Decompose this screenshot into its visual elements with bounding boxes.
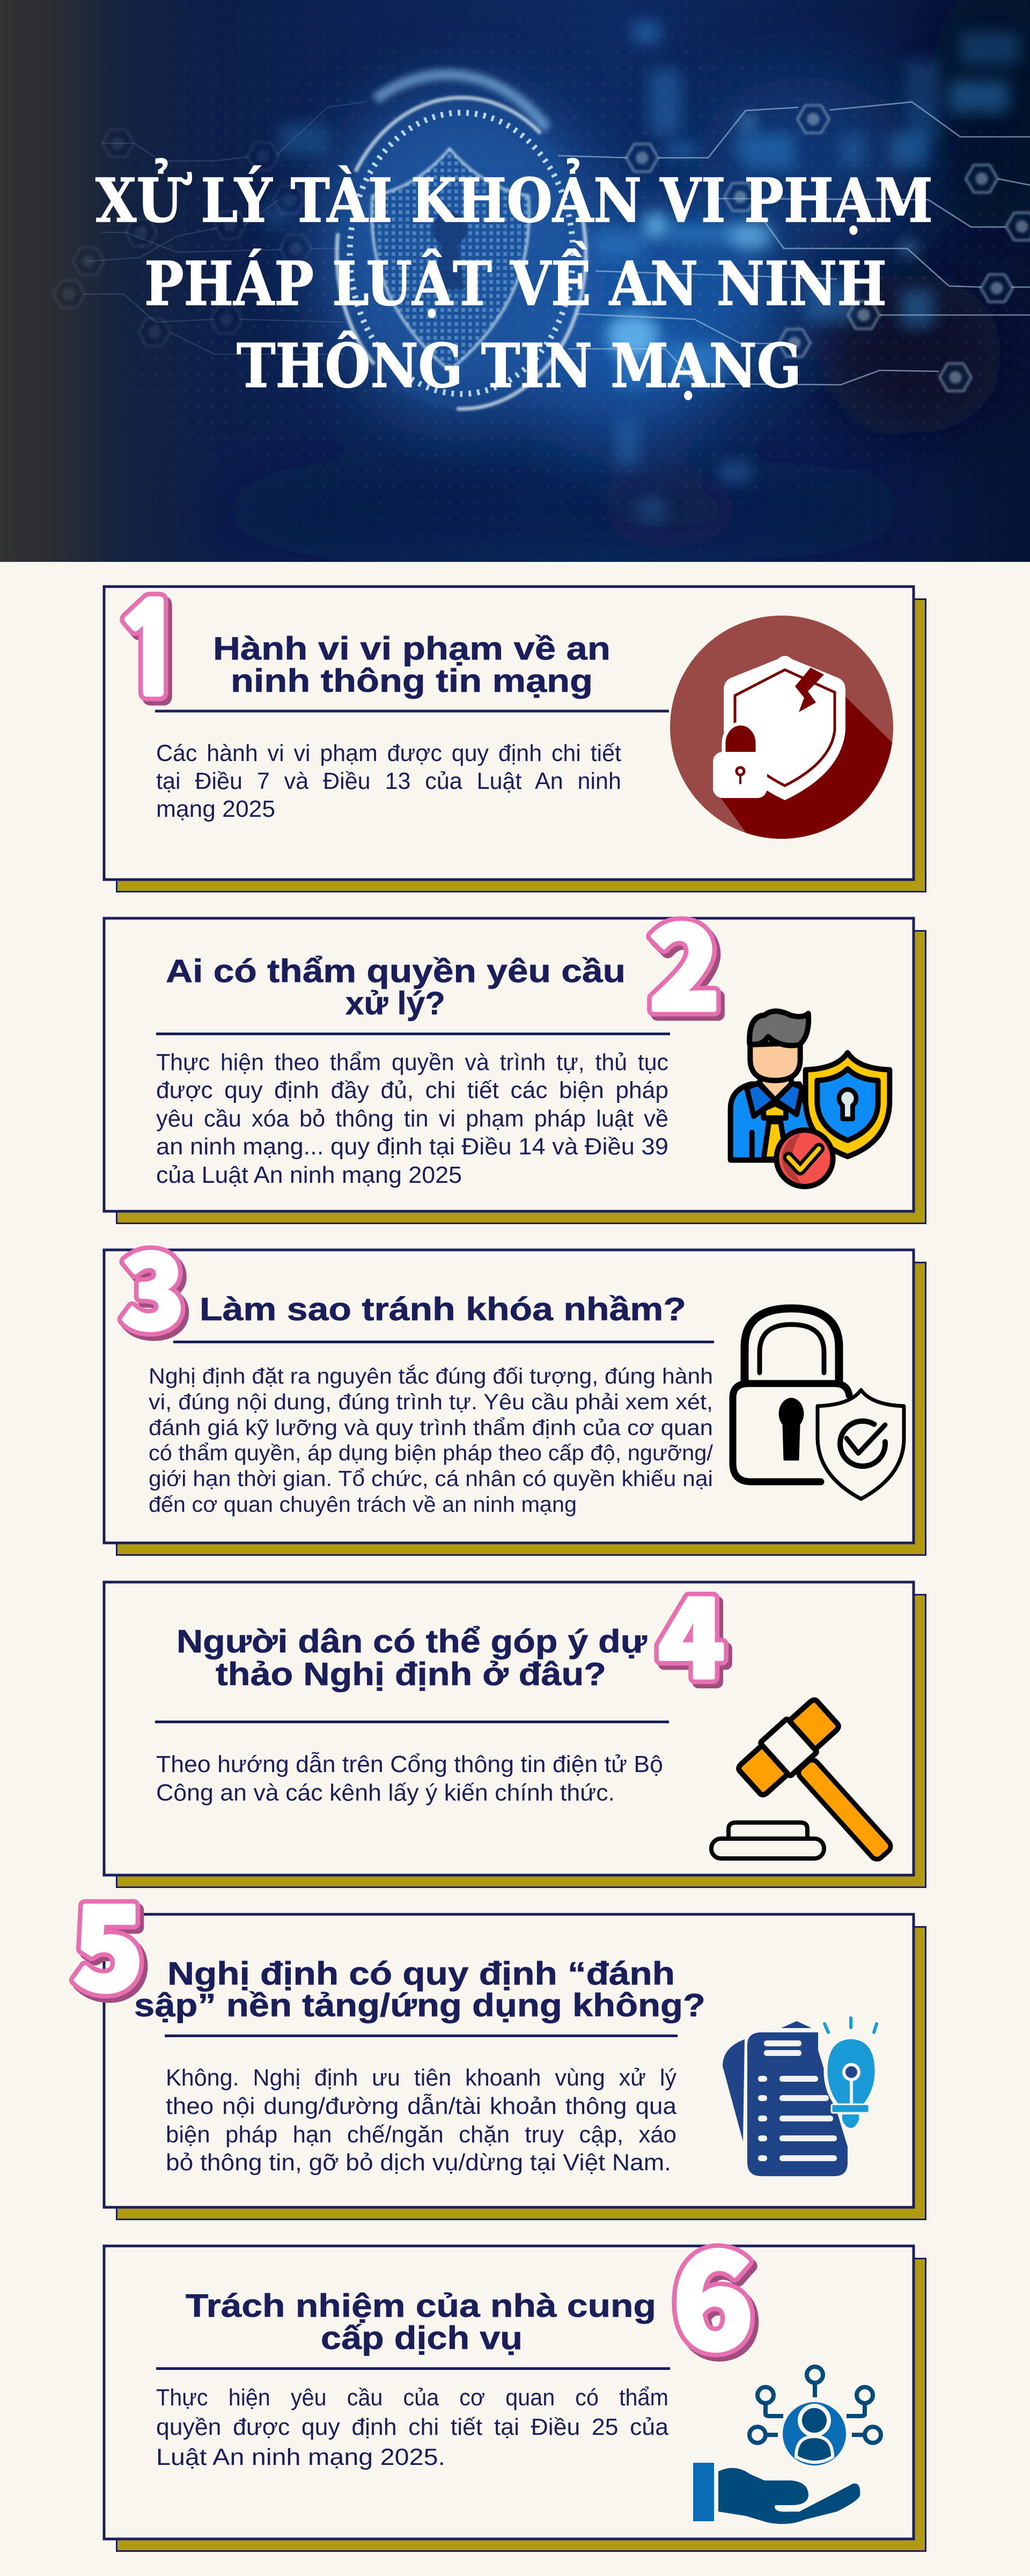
rule [156, 2367, 670, 2370]
body text: an ninh mạng... quy định tại Điều 14 và Điều 39 [156, 1134, 668, 1160]
body text: bỏ thông tin, gỡ bỏ dịch vụ/dừng tại Việt Nam. [166, 2150, 671, 2176]
bright highlights [606, 116, 915, 357]
rule [165, 2035, 678, 2037]
number 2: 2 [652, 878, 724, 1049]
body text [149, 1364, 713, 1517]
body text: của Luật An ninh mạng 2025 [156, 1162, 462, 1188]
body text: vi, đúng nội dung, đúng trình tự. Yêu cầu phải xem xét, [149, 1389, 713, 1414]
body text: Theo hướng dẫn trên Cổng thông tin điện tử Bộ [156, 1751, 663, 1777]
heading: ninh thông tin mạng [231, 663, 593, 699]
body text: được quy định đầy đủ, chi tiết các biện pháp [156, 1078, 668, 1103]
bokeh blocks [263, 21, 1019, 521]
panel 5: platform takedown [69, 1855, 926, 2220]
body text [156, 741, 621, 822]
body text: Thực hiện yêu cầu của cơ quan có thẩm [156, 2385, 668, 2411]
rule [173, 1341, 714, 1343]
body text: có thẩm quyền, áp dụng biện pháp theo cấp độ, ngưỡng/ [149, 1440, 713, 1465]
body text: Các hành vi vi phạm được quy định chi tiết [156, 741, 621, 766]
panel frame [104, 1914, 926, 2220]
heading: thảo Nghị định ở đâu? [216, 1656, 606, 1692]
heading: Hành vi vi phạm về an [213, 631, 610, 667]
number 1: 1 [113, 588, 188, 713]
hexagon icons [53, 105, 1030, 391]
heading: sập” nền tảng/ứng dụng không? [134, 1987, 705, 2023]
number 3: 3 [121, 1208, 185, 1359]
heading [166, 953, 626, 1021]
number 1: 1 [117, 592, 192, 717]
number 5: 5 [77, 1859, 148, 2029]
number 4: 4 [658, 1550, 725, 1709]
circuit lines [558, 102, 1030, 385]
body text: Thực hiện theo thẩm quyền và trình tự, thủ tục [156, 1050, 668, 1075]
title: XỬ LÝ TÀI KHOẢN VI PHẠM [95, 158, 933, 236]
icon: gavel and block [711, 1696, 923, 1889]
body text: giới hạn thời gian. Tổ chức, cá nhân có quyền khiếu nại [149, 1466, 713, 1491]
number 2: 2 [649, 874, 720, 1044]
heading: Làm sao tránh khóa nhầm? [200, 1291, 686, 1327]
body text: yêu cầu xóa bỏ thông tin vi phạm pháp luật về [156, 1106, 668, 1132]
number 6: 6 [676, 2198, 757, 2392]
panel frame [104, 587, 926, 892]
rule [155, 709, 669, 713]
body text: Không. Nghị định ưu tiên khoanh vùng xử lý [166, 2065, 676, 2091]
body text: Nghị định đặt ra nguyên tắc đúng đối tượng, đúng hành [149, 1364, 713, 1388]
icon: officer with shield and check badge [731, 1011, 889, 1187]
hero banner: cyber security background with title [0, 0, 1030, 562]
heading: xử lý? [345, 985, 445, 1021]
body text [156, 1751, 663, 1806]
number 2: 2 [649, 874, 720, 1044]
heading: Trách nhiệm của nhà cung [186, 2288, 656, 2324]
body text: theo nội dung/đường dẫn/tài khoản thông qua [166, 2093, 677, 2119]
panel frame [104, 1250, 926, 1555]
icon: padlock with shield [733, 1308, 904, 1499]
dot matrix [129, 0, 1030, 562]
heading: Người dân có thể góp ý dự [176, 1623, 648, 1659]
panel 1: violations [103, 585, 926, 892]
number 5: 5 [73, 1855, 144, 2024]
body text [156, 2385, 669, 2470]
number 3: 3 [125, 1212, 188, 1363]
body text: Công an và các kênh lấy ý kiến chính thức. [156, 1780, 615, 1806]
body text: mạng 2025 [156, 796, 275, 822]
number 4: 4 [658, 1550, 725, 1709]
body text [166, 2065, 677, 2176]
rule [155, 1721, 669, 1723]
body text: Luật An ninh mạng 2025. [156, 2445, 445, 2470]
number 6: 6 [672, 2193, 754, 2388]
icon: broken shield with padlock [670, 616, 893, 839]
heading: Nghị định có quy định “đánh [167, 1956, 675, 1992]
central shield ring [337, 75, 586, 409]
body text: đến cơ quan chuyên trách về an ninh mạng [149, 1492, 577, 1517]
panel frame [104, 2246, 926, 2551]
number 5: 5 [73, 1855, 144, 2024]
rule [156, 1033, 670, 1035]
heading [134, 1956, 705, 2023]
heading: cấp dịch vụ [321, 2320, 523, 2356]
number 4: 4 [662, 1555, 729, 1714]
title: THÔNG TIN MẠNG [237, 331, 801, 401]
heading [213, 631, 610, 699]
panel frame [104, 918, 926, 1224]
body text [156, 1050, 668, 1188]
body text: quyền được quy định chi tiết tại Điều 25 của [156, 2414, 669, 2440]
panel frame [104, 1582, 926, 1887]
number 3: 3 [121, 1208, 185, 1359]
body text: đánh giá kỹ lưỡng và quy trình thẩm định của cơ quan [149, 1415, 713, 1440]
number 1: 1 [113, 588, 188, 713]
soft glows [215, 0, 1030, 569]
icon: document with light bulb [723, 2018, 877, 2176]
heading [176, 1623, 648, 1692]
panel 6: provider responsibility [103, 2193, 926, 2552]
panel 4: public comments [103, 1550, 926, 1888]
body text: biện pháp hạn chế/ngăn chặn truy cập, xáo [166, 2122, 676, 2148]
number 6: 6 [672, 2193, 754, 2388]
heading: Ai có thẩm quyền yêu cầu [166, 953, 626, 989]
icon: hand holding network user [693, 2367, 881, 2524]
panel 2: competent authority [103, 874, 926, 1224]
title: PHÁP LUẬT VỀ AN NINH [144, 241, 887, 319]
body text: tại Điều 7 và Điều 13 của Luật An ninh [156, 769, 621, 794]
heading [186, 2288, 656, 2356]
panel 3: avoiding wrongful blocks [103, 1208, 926, 1556]
title [95, 158, 933, 401]
